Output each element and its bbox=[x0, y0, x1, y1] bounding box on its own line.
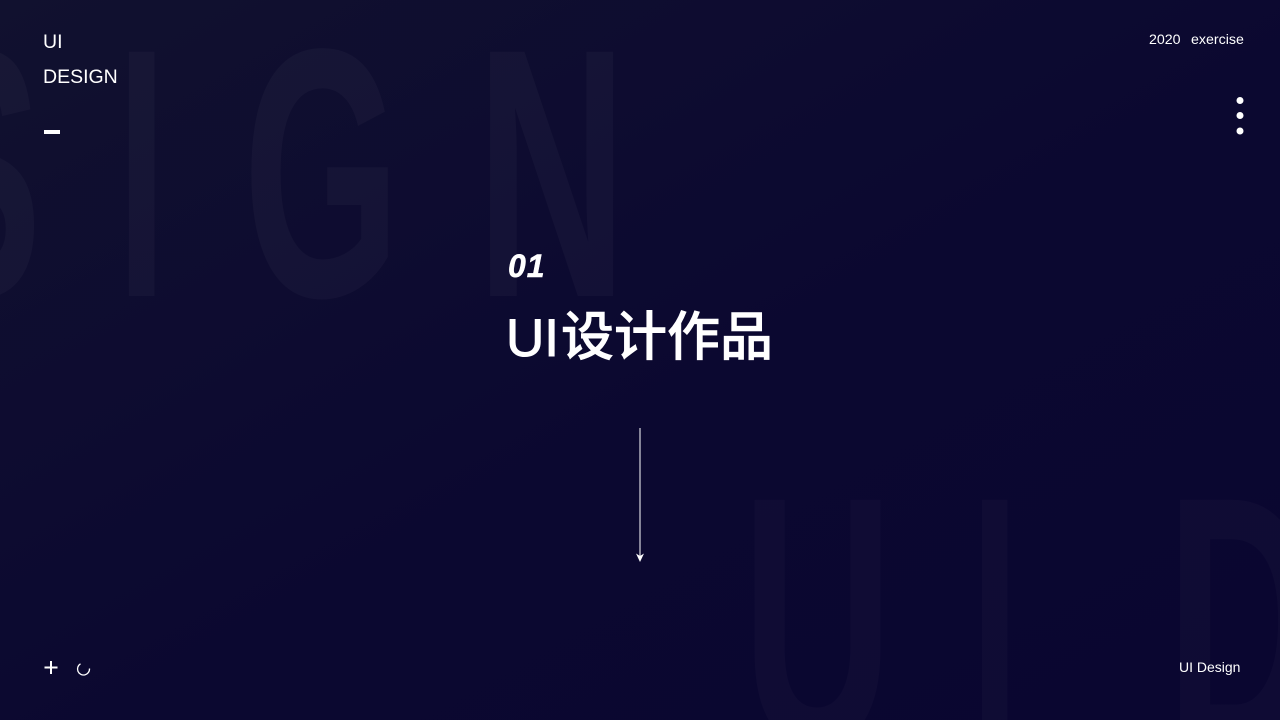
logo dash bbox=[44, 130, 60, 134]
logo text: DESIGN bbox=[43, 66, 118, 88]
title: UI bbox=[506, 309, 559, 368]
watermark: SIGN bbox=[0, 0, 627, 372]
footer label: UI Design bbox=[1179, 659, 1240, 675]
year label: 2020 bbox=[1149, 32, 1181, 48]
icon: plus bbox=[44, 661, 58, 674]
watermark: UID bbox=[76, 665, 90, 672]
icon: menu dots bbox=[1236, 97, 1244, 134]
icon: loading circle bbox=[78, 664, 90, 675]
arrow bbox=[636, 428, 644, 562]
title: 设计作品 bbox=[561, 308, 773, 367]
exercise label: exercise bbox=[1191, 32, 1244, 48]
logo text: UI bbox=[43, 31, 62, 53]
section number: 01 bbox=[508, 248, 546, 284]
logo text bbox=[43, 31, 118, 88]
